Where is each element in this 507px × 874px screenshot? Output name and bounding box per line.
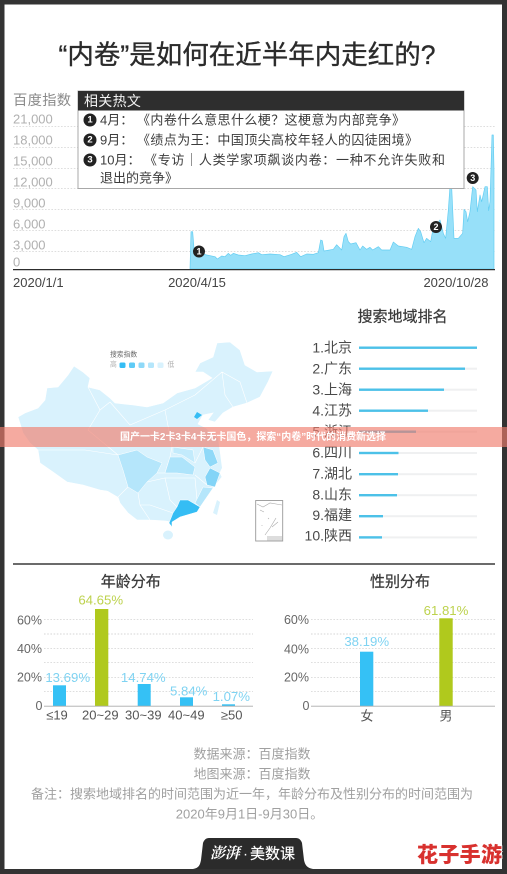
age y axis labels: 0 [36,699,43,713]
age value labels: 13.69% [45,670,90,685]
source notes: 2020年9月1日-9月30日。 [176,806,323,822]
x axis date labels: 2020/4/15 [168,275,226,290]
rank 7 Hubei: 7.湖北 [312,466,352,482]
gender y axis labels: 40% [284,642,309,656]
Taiwan [213,500,220,515]
article 3: 10月： [100,152,140,168]
gender category labels: 女 [360,708,374,724]
bar chart: gender distribution [284,574,495,724]
map legend [110,350,174,368]
age axis line [44,705,253,707]
overlay banner: 国产一卡2卡3卡4卡无卡国色，探索“内卷”时代的消费新选择 [120,430,386,443]
y axis labels: 6,000 [13,216,46,232]
x axis date labels: 2020/1/1 [13,275,64,290]
age y axis labels: 20% [17,670,42,684]
marker 3: 3 [470,173,475,183]
y axis labels [13,112,53,270]
gender category labels: 男 [439,708,453,724]
rank 2 Guangdong: 2.广东 [312,360,352,376]
rank 8 Shandong: 8.山东 [312,486,352,502]
logo tab: · [243,846,248,862]
ranking heading: 搜索地域排名 [357,308,448,326]
article 1: 《内卷什么意思什么梗？这梗意为内部竞争》 [137,112,405,128]
watermark: 花子手游 [417,843,502,867]
y axis labels: 15,000 [13,154,53,168]
article 3: 3 [87,154,93,166]
section divider [13,563,495,565]
gender y axis labels [284,613,310,713]
gender y axis labels: 60% [284,613,309,627]
rank 9 Fujian: 9.福建 [312,507,352,523]
article 3 [84,152,445,186]
gender value labels [344,603,469,649]
panel header [78,91,464,110]
age value labels [45,592,250,704]
age category labels: 40~49 [168,708,205,722]
age category labels: ≤19 [46,708,68,722]
overlay banner [0,427,507,447]
article 2: 《绩点为王：中国顶尖高校年轻人的囚徒困境》 [137,132,418,148]
Jiangsu [203,447,218,467]
y axis labels: 12,000 [13,174,53,190]
South China Sea inset [256,500,283,541]
rank 6 Sichuan: 6.四川 [312,444,352,460]
source notes: 地图来源：百度指数 [193,766,311,782]
title: “内卷”是如何在近半年内走红的? [59,40,435,70]
y axis labels: 3,000 [13,238,46,252]
age category labels: 20~29 [82,708,119,722]
age y axis labels [17,614,43,713]
article 3: 退出的竞争》 [100,170,178,186]
age gridlines [44,619,253,691]
age value labels: 14.74% [121,670,166,685]
marker 1: 1 [196,246,202,256]
bar chart: age distribution [17,574,253,722]
age category labels [46,708,243,722]
Hainan [163,530,173,540]
rank 4 Jiangsu: 4.江苏 [312,402,352,418]
gender chart heading: 性别分布 [370,574,430,590]
China base outline [18,342,273,522]
marker 3 [467,172,479,184]
Sichuan [118,450,162,493]
source notes: 备注：搜索地域排名的时间范围为近一年，年龄分布及性别分布的时间范围为 [31,786,473,802]
source notes: 数据来源：百度指数 [193,746,311,762]
y axis labels: 0 [13,254,20,270]
age value labels: 1.07% [213,689,250,704]
article 1: 1 [87,114,93,126]
age value labels: 5.84% [170,684,208,698]
gender bars [360,618,453,706]
choropleth map of China [18,342,283,541]
search region ranking [305,308,477,544]
gender value labels: 38.19% [344,634,389,649]
article 3: 《专访｜人类学家项飙谈内卷：一种不允许失败和 [144,152,445,168]
article 2: 9月： [100,132,133,148]
southern China fill [38,438,222,521]
gender category labels [360,708,453,724]
article 1: 4月： [100,112,133,128]
gender y axis labels: 20% [284,670,309,684]
logo tab: 澎湃 [210,845,243,862]
marker 1 [193,246,205,258]
logo tab: 美数课 [250,846,295,862]
rank 5 Zhejiang: 5.浙江 [312,424,352,440]
age bars [53,609,235,706]
rank 1 Beijing: 1.北京 [312,340,352,356]
age category labels: 30~39 [125,708,162,722]
rank 3 Shanghai: 3.上海 [312,382,352,398]
age y axis labels: 40% [17,642,42,656]
map legend: 高 [110,360,117,368]
rank 10 Shaanxi: 10.陕西 [305,528,352,544]
gender value labels: 61.81% [424,603,469,618]
age y axis labels: 60% [17,614,42,628]
marker 2 [430,221,442,233]
y axis title: 百度指数 [13,92,71,109]
source notes [31,746,473,822]
marker 2: 2 [433,222,439,232]
panel box [78,91,464,188]
age value labels: 64.65% [78,592,123,608]
article 2: 2 [87,134,93,146]
Henan [173,447,195,463]
panel heading: 相关热文 [84,93,141,109]
panel: related hot articles [78,91,464,188]
y axis gridlines [13,127,495,251]
Fujian [195,487,213,507]
y axis labels: 9,000 [13,196,46,210]
Guangdong [169,500,200,527]
x axis line [13,269,495,271]
logo tab [193,838,313,869]
gender gridlines [311,619,495,691]
search index area series [190,135,494,269]
Hubei [165,457,195,475]
age chart heading: 年龄分布 [101,574,161,590]
map legend: 搜索指数 [110,350,137,358]
Beijing [194,412,202,419]
province borders [38,372,247,520]
x axis date labels: 2020/10/28 [423,275,489,290]
gender y axis labels: 0 [303,699,310,713]
y axis labels: 18,000 [13,132,53,148]
area chart: Baidu index [13,92,495,290]
x axis date labels [13,275,489,290]
map legend: 低 [168,360,174,368]
age category labels: ≥50 [221,708,243,722]
gender axis line [311,705,495,707]
Zhejiang [205,468,220,487]
y axis labels: 21,000 [13,112,53,126]
